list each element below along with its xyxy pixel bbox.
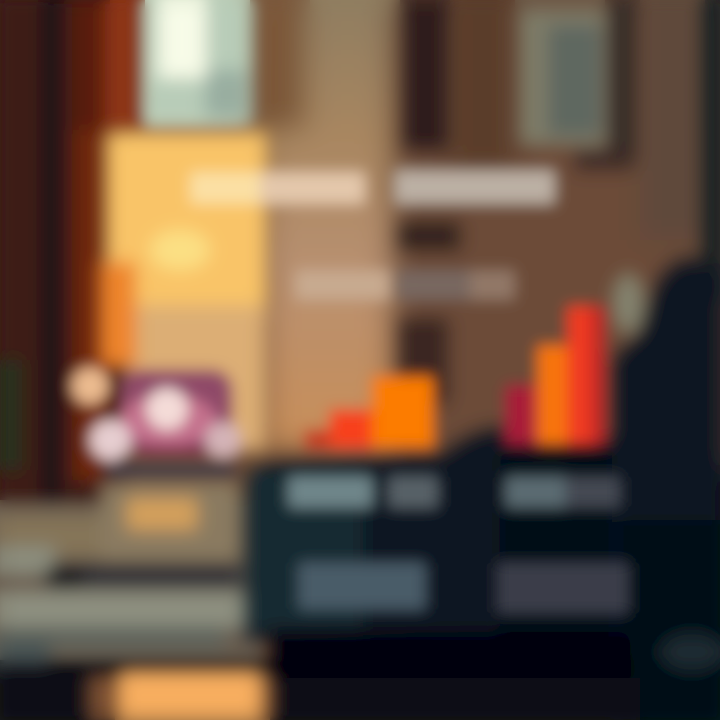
heading xyxy=(190,170,555,204)
background wall xyxy=(250,0,720,470)
bottom floor xyxy=(0,632,640,720)
table and papers xyxy=(0,482,258,676)
donut chart xyxy=(71,367,241,478)
stat value left xyxy=(298,562,426,610)
picture frame xyxy=(520,0,636,170)
floor reflection xyxy=(88,670,273,720)
bar chart right xyxy=(505,306,605,445)
stat label right xyxy=(505,476,620,508)
lamp glow xyxy=(100,132,266,450)
window xyxy=(145,0,250,122)
subheading xyxy=(295,270,515,300)
curtain xyxy=(0,0,135,500)
stat label left xyxy=(288,476,438,508)
dark lower panel xyxy=(245,428,620,650)
bar chart left xyxy=(305,376,434,448)
dark wall columns xyxy=(398,0,720,403)
dark figure at right xyxy=(500,258,720,720)
stat value right xyxy=(497,562,629,614)
